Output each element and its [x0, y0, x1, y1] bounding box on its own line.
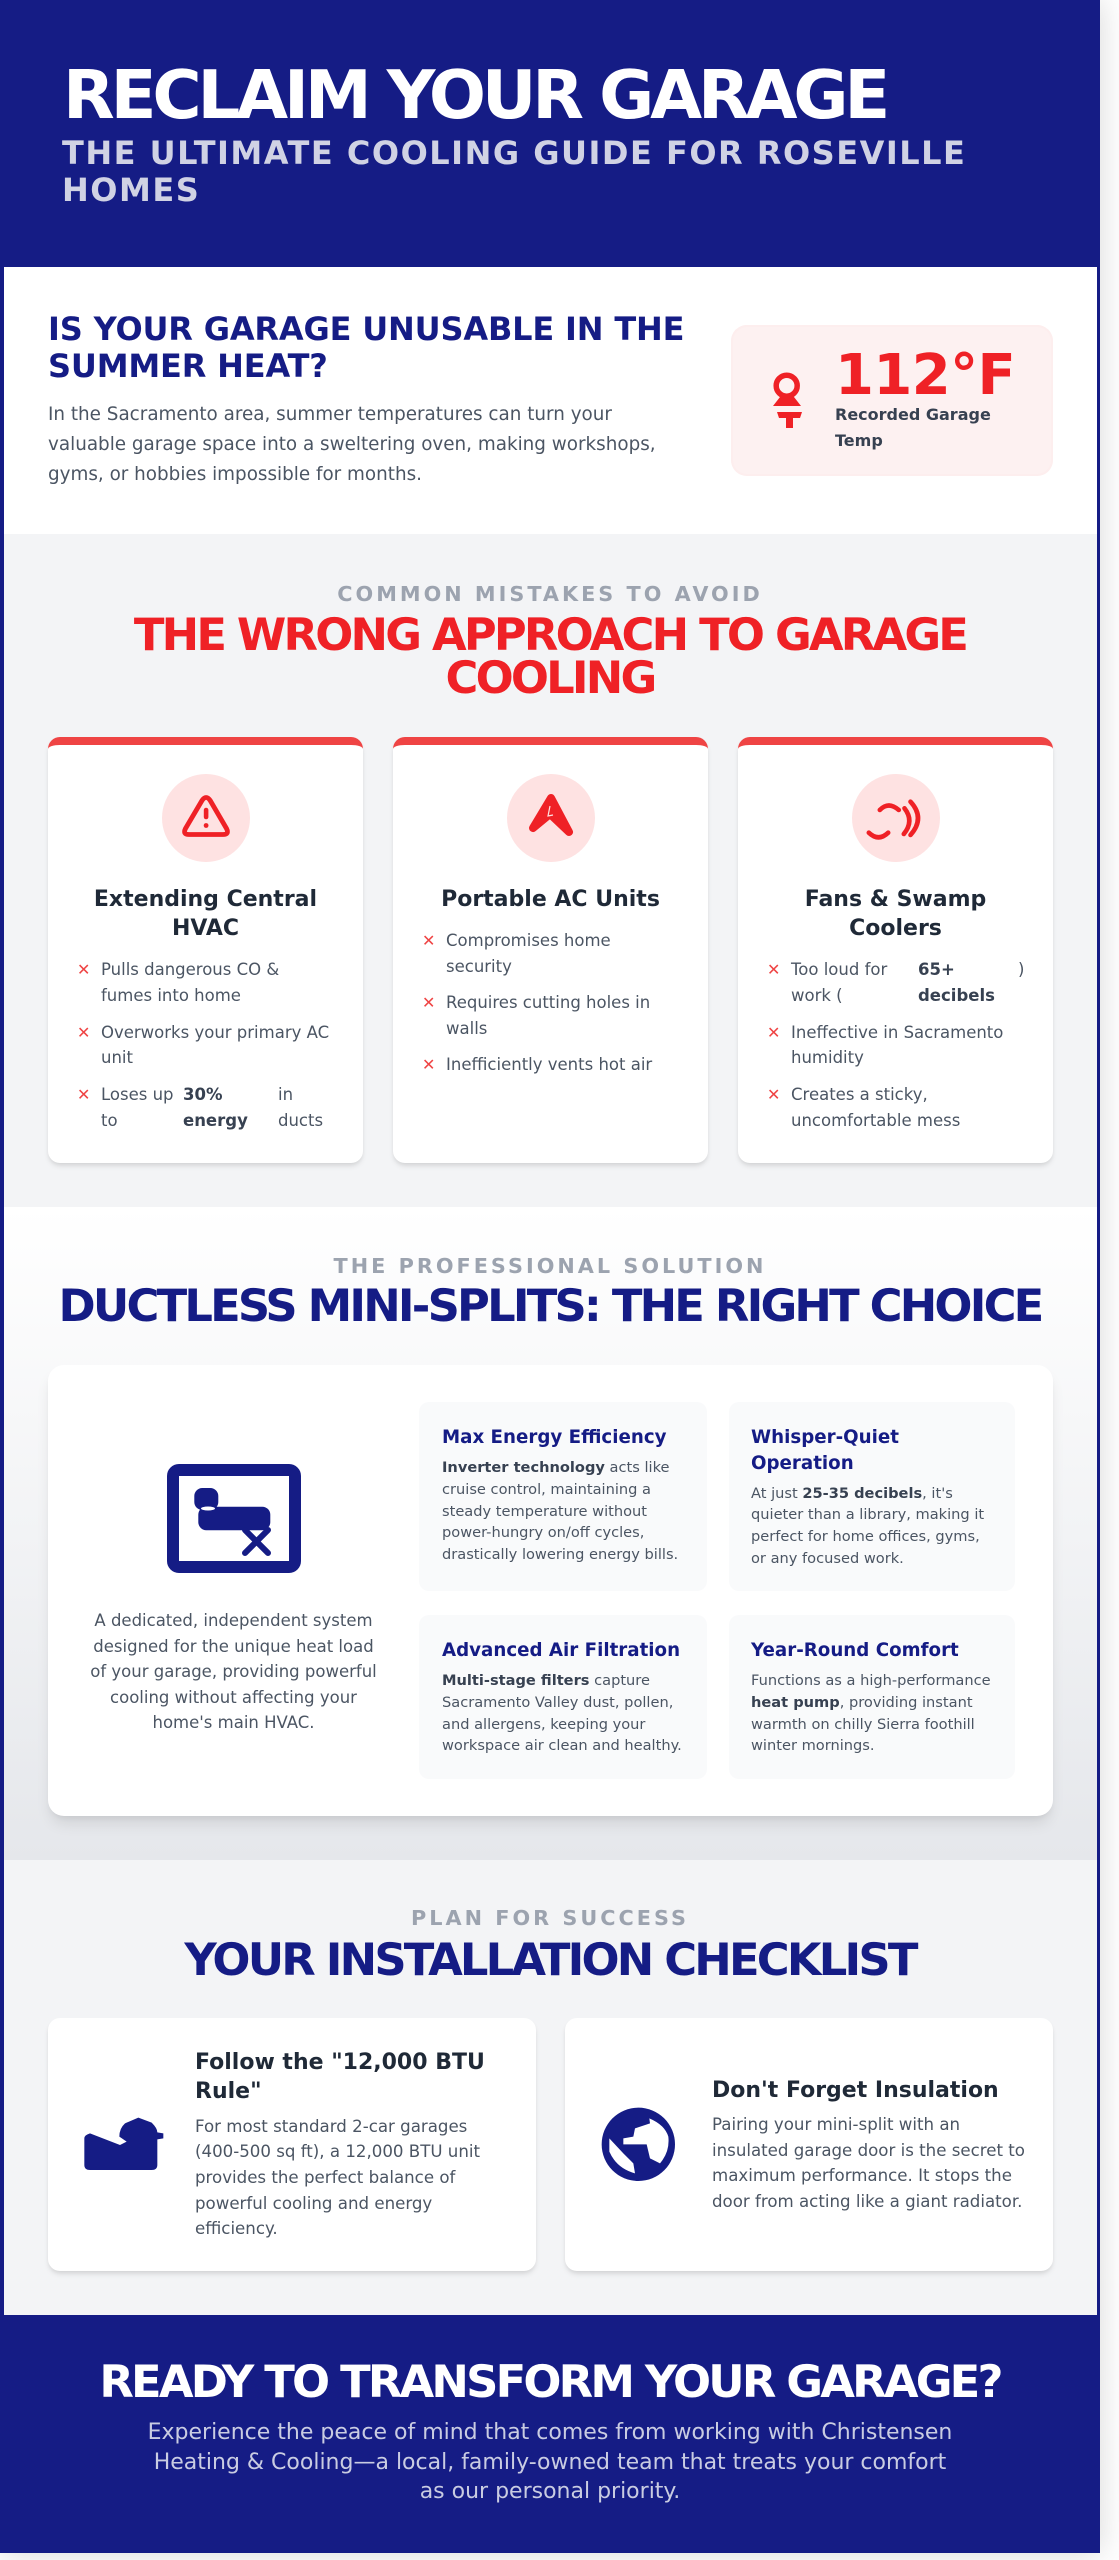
icon: portable unit [506, 774, 594, 862]
feature: quiet operation [729, 1402, 1015, 1591]
card: extending central HVAC: 30% [183, 1085, 222, 1104]
feature text: heat pump, providing instant [751, 1694, 973, 1711]
checklist text: provides the perfect balance of [195, 2168, 455, 2187]
checklist text: efficiency. [195, 2219, 278, 2238]
feature text: Multi-stage filters capture [442, 1672, 650, 1689]
list item: walls [446, 1019, 487, 1038]
section heading: THE WRONG APPROACH TO GARAGE [134, 608, 966, 661]
problem heading: IS YOUR GARAGE UNUSABLE IN THE [48, 310, 684, 348]
feature text: winter mornings. [751, 1737, 875, 1754]
card title: Portable AC Units [441, 887, 660, 912]
feature text: or any focused work. [751, 1550, 904, 1567]
list item: Pulls dangerous CO & [101, 960, 279, 979]
list item: humidity [791, 1048, 864, 1067]
problem text: valuable garage space into a sweltering oven, making workshops, [48, 434, 656, 455]
card: fans and swamp coolers: ) [1018, 960, 1024, 979]
list item [767, 1085, 960, 1130]
system description: A dedicated, independent system [94, 1611, 373, 1630]
feature: energy efficiency [419, 1402, 707, 1591]
list item: uncomfortable mess [791, 1111, 960, 1130]
card title: Extending Central [94, 887, 317, 912]
feature text: quieter than a library, making it [751, 1506, 984, 1523]
CTA text: as our personal priority. [420, 2479, 680, 2504]
list item [77, 1022, 329, 1067]
checklist text: powerful cooling and energy [195, 2194, 432, 2213]
card: extending central HVAC: in [278, 1085, 293, 1104]
icon: mini-split unit [167, 1464, 301, 1573]
list item: Creates a sticky, [791, 1085, 928, 1104]
list item [767, 960, 1024, 1005]
card: extending central HVAC: ✕ [77, 1022, 90, 1042]
checklist title: Rule" [195, 2079, 262, 2104]
feature text: drastically lowering energy bills. [442, 1546, 678, 1563]
feature: year-round comfort [729, 1615, 1015, 1779]
checklist text: For most standard 2-car garages [195, 2117, 467, 2136]
section kicker: COMMON MISTAKES TO AVOID [337, 582, 763, 606]
card: insulation [565, 2018, 1053, 2271]
panel: professional solution [0, 1207, 1100, 1860]
panel: installation checklist [0, 1860, 1100, 2315]
feature text: steady temperature without [442, 1503, 647, 1520]
feature text [751, 1672, 991, 1754]
card title: Coolers [849, 916, 942, 941]
feature text: warmth on chilly Sierra foothill [751, 1716, 975, 1733]
panel: common mistakes [0, 534, 1100, 1207]
list item: Inefficiently vents hot air [446, 1055, 652, 1074]
subtitle: HOMES [62, 170, 200, 208]
card: portable AC units: ✕ [422, 993, 435, 1012]
list item [77, 1085, 323, 1130]
icon: fan and noise [852, 774, 940, 862]
list item: Compromises home [446, 931, 611, 950]
list item: Loses up [101, 1085, 174, 1104]
checklist text: door from acting like a giant radiator. [712, 2192, 1022, 2211]
list item [422, 993, 650, 1038]
checklist text [195, 2117, 480, 2238]
problem text: gyms, or hobbies impossible for months. [48, 464, 422, 485]
list item [422, 931, 611, 976]
problem heading: SUMMER HEAT? [48, 347, 328, 385]
panel: problem intro [0, 267, 1100, 534]
solution card [48, 1365, 1053, 1816]
system description: home's main HVAC. [152, 1713, 315, 1732]
stat value: 112°F [835, 342, 1015, 408]
problem text [48, 404, 656, 485]
icon: warning triangle [162, 774, 250, 862]
feature text [751, 1485, 984, 1567]
card title: Fans & Swamp [805, 887, 986, 912]
feature text: Sacramento Valley dust, pollen, [442, 1694, 673, 1711]
problem text: In the Sacramento area, summer temperatures can turn your [48, 404, 612, 425]
card: BTU rule [48, 2018, 536, 2271]
system description: designed for the unique heat load [93, 1637, 374, 1656]
card: extending central HVAC: ✕ [77, 1085, 90, 1104]
feature text: Functions as a high-performance [751, 1672, 991, 1689]
stat card: 112°F [731, 325, 1053, 476]
feature: air filtration [419, 1615, 707, 1779]
card: portable AC units: ✕ [422, 931, 435, 950]
card: extending central HVAC: ducts [278, 1111, 323, 1130]
stat label: Recorded Garage [835, 405, 991, 424]
icon: garage sizing [84, 2118, 164, 2170]
feature text [442, 1672, 682, 1754]
feature title: Advanced Air Filtration [442, 1640, 680, 1660]
icon: thermometer [773, 372, 802, 428]
list item: Too loud for [791, 960, 887, 979]
feature title: Operation [751, 1453, 854, 1474]
subtitle [62, 134, 966, 208]
title: RECLAIM YOUR GARAGE [63, 56, 886, 134]
card title: HVAC [172, 916, 239, 941]
list item: fumes into home [101, 986, 241, 1005]
feature title: Whisper-Quiet [751, 1427, 899, 1448]
card: portable AC units [393, 737, 708, 1163]
card title [805, 887, 986, 941]
checklist title [195, 2050, 485, 2104]
feature title [751, 1427, 899, 1474]
feature text: power-hungry on/off cycles, [442, 1524, 644, 1541]
section heading: DUCTLESS MINI-SPLITS: THE RIGHT CHOICE [59, 1278, 1041, 1332]
card: extending central HVAC: energy [183, 1111, 248, 1130]
header banner [0, 0, 1100, 267]
list item [767, 1022, 1003, 1067]
card: portable AC units: ✕ [422, 1055, 435, 1074]
checklist text: maximum performance. It stops the [712, 2166, 1012, 2185]
card: fans and swamp coolers [738, 737, 1053, 1163]
checklist text: insulated garage door is the secret to [712, 2141, 1025, 2160]
feature text: cruise control, maintaining a [442, 1481, 651, 1498]
card: fans and swamp coolers: ✕ [767, 960, 780, 979]
list item: unit [101, 1048, 133, 1067]
card: extending central HVAC: ✕ [77, 960, 90, 979]
section heading: YOUR INSTALLATION CHECKLIST [184, 1933, 916, 1986]
system description [90, 1611, 377, 1732]
card: fans and swamp coolers: 65+ [918, 960, 955, 979]
card: fans and swamp coolers: ✕ [767, 1085, 780, 1104]
CTA text: Experience the peace of mind that comes from working with Christensen [148, 2420, 952, 2445]
stat label: Temp [835, 431, 883, 450]
checklist text [712, 2115, 1025, 2211]
section kicker: PLAN FOR SUCCESS [411, 1906, 689, 1930]
feature text [442, 1459, 678, 1563]
problem heading [48, 310, 684, 385]
section heading: COOLING [446, 651, 654, 704]
checklist text: Pairing your mini-split with an [712, 2115, 960, 2134]
checklist title: Follow the "12,000 BTU [195, 2050, 485, 2075]
feature text: At just 25-35 decibels, it's [751, 1485, 953, 1502]
subtitle: THE ULTIMATE COOLING GUIDE FOR ROSEVILLE [62, 134, 966, 172]
feature title: Max Energy Efficiency [442, 1427, 667, 1448]
feature text: Inverter technology acts like [442, 1459, 670, 1476]
list item: to [101, 1111, 118, 1130]
section heading [134, 608, 966, 704]
feature text: perfect for home offices, gyms, [751, 1528, 980, 1545]
checklist title: Don't Forget Insulation [712, 2078, 999, 2102]
CTA text [148, 2420, 952, 2504]
card: extending central HVAC [48, 737, 363, 1163]
list item: Overworks your primary AC [101, 1022, 329, 1042]
feature text: workspace air clean and healthy. [442, 1737, 682, 1754]
CTA heading: READY TO TRANSFORM YOUR GARAGE? [99, 2354, 1001, 2408]
checklist text: (400-500 sq ft), a 12,000 BTU unit [195, 2142, 480, 2161]
stat label [835, 405, 991, 450]
list item: Ineffective in Sacramento [791, 1022, 1003, 1042]
card: fans and swamp coolers: decibels [918, 986, 995, 1005]
list item: work ( [791, 986, 843, 1005]
icon: globe [602, 2108, 675, 2181]
list item: security [446, 957, 512, 976]
feature text: and allergens, keeping your [442, 1716, 645, 1733]
card: fans and swamp coolers: ✕ [767, 1022, 780, 1042]
list item: Requires cutting holes in [446, 993, 650, 1012]
section kicker: THE PROFESSIONAL SOLUTION [334, 1254, 766, 1278]
card title [94, 887, 317, 941]
feature title: Year-Round Comfort [751, 1640, 959, 1660]
CTA text: Heating & Cooling—a local, family-owned team that treats your comfort [154, 2450, 946, 2474]
call to action banner [0, 2315, 1100, 2553]
system description: cooling without affecting your [110, 1688, 357, 1707]
system description: of your garage, providing powerful [90, 1662, 377, 1681]
list item [77, 960, 279, 1005]
